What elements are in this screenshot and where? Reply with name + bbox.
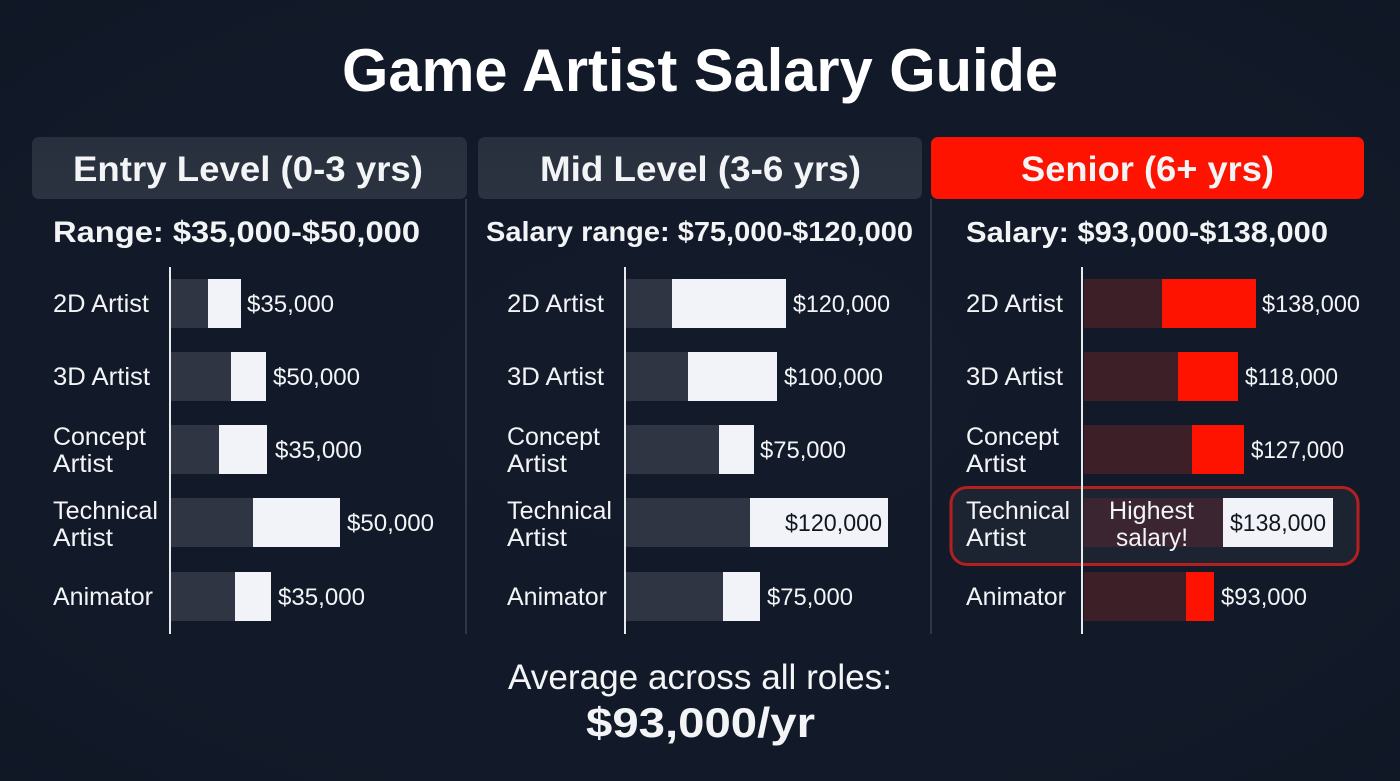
row: Animator: Animator xyxy=(966,583,1066,611)
heading: senior xyxy=(931,137,1364,199)
row: Technical Artist: $138,000 xyxy=(1230,510,1326,537)
row: Technical Artist: $120,000 xyxy=(785,510,882,537)
row: Animator: Animator xyxy=(507,583,607,611)
chart: mid level bars xyxy=(507,267,890,634)
row: 3D Artist: 3D Artist xyxy=(966,363,1063,391)
row: 2D Artist: 2D Artist xyxy=(53,290,149,318)
row: 3D Artist: $50,000 xyxy=(273,364,360,391)
row: Concept Artist xyxy=(53,423,362,478)
row: Concept Artist: $75,000 xyxy=(760,437,846,464)
row: Technical Artist: Artist xyxy=(53,524,113,552)
chart: entry level bars xyxy=(53,267,434,634)
row: 2D Artist: $35,000 xyxy=(247,291,334,318)
row: Concept Artist: Artist xyxy=(53,450,113,478)
title: Game Artist Salary Guide xyxy=(342,37,1058,104)
row: Animator xyxy=(53,572,365,621)
row: Technical Artist: Technical xyxy=(53,497,158,525)
row: Technical Artist xyxy=(966,497,1333,552)
row: 2D Artist xyxy=(53,279,334,328)
row: Technical Artist: Artist xyxy=(966,524,1026,552)
salary range: senior: Salary: $93,000-$138,000 xyxy=(966,217,1328,249)
row: Technical Artist: Highest xyxy=(1109,497,1194,525)
row: 2D Artist xyxy=(507,279,890,328)
row: Animator: $75,000 xyxy=(767,584,853,611)
row: Technical Artist: Technical xyxy=(966,497,1070,525)
row: Technical Artist: $50,000 xyxy=(347,510,434,537)
salary range: entry level: Range: $35,000-$50,000 xyxy=(53,216,420,249)
row: Concept Artist: Artist xyxy=(507,450,567,478)
row: Concept Artist xyxy=(507,423,846,478)
panel: entry level xyxy=(32,137,467,634)
row: Concept Artist: $35,000 xyxy=(275,437,362,464)
row: 2D Artist: $120,000 xyxy=(793,291,890,318)
footer: average salary xyxy=(508,658,892,746)
row: 2D Artist: 2D Artist xyxy=(966,290,1063,318)
heading: mid level: Mid Level (3-6 yrs) xyxy=(540,150,861,189)
footer: average salary: $93,000/yr xyxy=(586,699,815,746)
row: Animator: $93,000 xyxy=(1221,584,1307,611)
row: 2D Artist: $138,000 xyxy=(1262,291,1360,318)
row: Concept Artist: $127,000 xyxy=(1251,437,1344,464)
row: 3D Artist xyxy=(507,352,883,401)
row: 3D Artist: $100,000 xyxy=(784,364,883,391)
row: 3D Artist: 3D Artist xyxy=(53,363,150,391)
row: 3D Artist: 3D Artist xyxy=(507,363,604,391)
row: 3D Artist xyxy=(966,352,1338,401)
row: Concept Artist: Artist xyxy=(966,450,1026,478)
row: Technical Artist: Technical xyxy=(507,497,612,525)
heading: entry level: Entry Level (0-3 yrs) xyxy=(73,150,423,189)
panel: senior xyxy=(931,137,1364,634)
footer: average salary: Average across all roles: xyxy=(508,658,892,697)
row: 3D Artist xyxy=(53,352,360,401)
row: 2D Artist: 2D Artist xyxy=(507,290,604,318)
heading: mid level xyxy=(478,137,922,199)
row: 3D Artist: $118,000 xyxy=(1245,364,1338,391)
row: Animator xyxy=(966,572,1307,621)
row: Animator xyxy=(507,572,853,621)
row: 2D Artist xyxy=(966,279,1360,328)
row: Concept Artist: Concept xyxy=(507,423,600,451)
row: Concept Artist: Concept xyxy=(53,423,146,451)
row: Concept Artist xyxy=(966,423,1344,478)
row: Technical Artist: Artist xyxy=(507,524,567,552)
heading: entry level xyxy=(32,137,467,199)
row: Technical Artist xyxy=(507,497,888,552)
row: Animator: $35,000 xyxy=(278,584,365,611)
row: Technical Artist: salary! xyxy=(1116,524,1188,552)
panel: mid level xyxy=(478,137,932,634)
heading: senior: Senior (6+ yrs) xyxy=(1021,150,1274,189)
chart: senior bars xyxy=(951,267,1360,634)
row: Technical Artist xyxy=(53,497,434,552)
row: Concept Artist: Concept xyxy=(966,423,1059,451)
salary range: mid level: Salary range: $75,000-$120,000 xyxy=(486,216,913,247)
row: Animator: Animator xyxy=(53,583,153,611)
callout: highest salary highlight xyxy=(951,488,1358,564)
